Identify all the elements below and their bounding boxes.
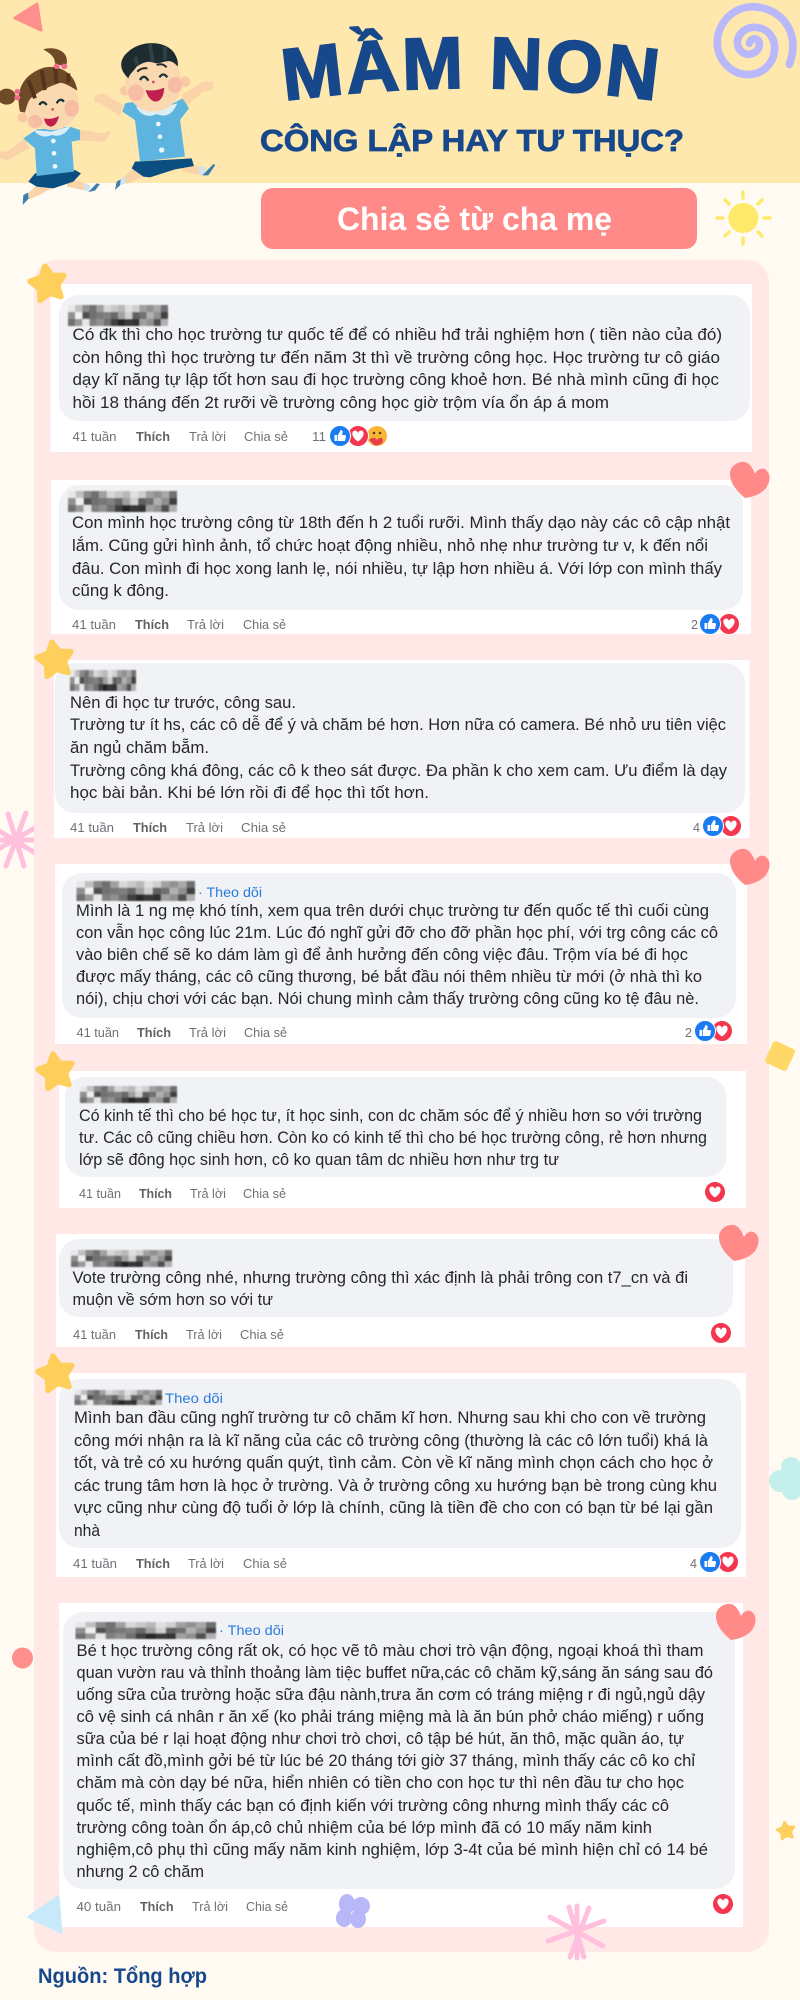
reaction: love bbox=[710, 1322, 732, 1344]
comment card 5 bbox=[59, 1071, 746, 1208]
comment bubble bbox=[63, 1612, 735, 1889]
icon: sun bbox=[717, 192, 770, 244]
girl bbox=[0, 48, 112, 205]
comment text: Có kinh tế thì cho bé học tư, ít học sinh, con dc chăm sóc để ý nhiều hơn so với trường bbox=[79, 1106, 702, 1125]
reaction: love bbox=[704, 1182, 726, 1202]
comment text bbox=[72, 325, 722, 412]
comment text: Mình ban đầu cũng nghĩ trường tư cô chăm kĩ hơn. Nhưng sau khi cho con về trường bbox=[74, 1408, 706, 1427]
blurred name bbox=[76, 1622, 216, 1639]
comment text: công mới nhận ra là kĩ năng của các cô trường công (thường là các cô lớn tuổi) khá là bbox=[74, 1431, 709, 1450]
comment text: vực cũng như cùng độ tuổi ở lớp là chính, cũng là tiền đề cho con có bạn từ bé lại gần bbox=[74, 1498, 713, 1517]
comment text: quốc tế, mình thấy các bạn có định kiến với trường công nhưng mình thấy các cô bbox=[76, 1796, 669, 1815]
comment text: học bài bản. Khi bé lớn rồi đi để học thì tốt hơn. bbox=[70, 783, 429, 802]
comment text: tư. Các cô cũng chiều hơn. Còn ko có kinh tế thì cho bé học trường công, rẻ hơn nhưng bbox=[79, 1128, 707, 1147]
header banner bbox=[0, 0, 800, 183]
comment actions: Chia sẻ bbox=[240, 1328, 284, 1342]
icon: mint flower bbox=[769, 1457, 800, 1500]
reactions bbox=[702, 816, 742, 836]
title: MẦM NON bbox=[282, 26, 658, 101]
comment text: hồi 18 tháng đến 2t rưỡi về trường công học giờ trộm vía ổn áp á mom bbox=[72, 393, 609, 412]
follow link: Theo dõi bbox=[165, 1391, 223, 1406]
icon: coral heart 2 bbox=[730, 849, 770, 885]
card surface bbox=[59, 1603, 743, 1927]
comment actions bbox=[73, 1557, 697, 1571]
blurred name bbox=[71, 1250, 172, 1267]
comment text bbox=[72, 1268, 688, 1309]
comment text: các trung tâm hơn là học ở trường. Và ở trường công xu hướng bạn bè trong cùng khu bbox=[74, 1476, 717, 1495]
reactions bbox=[700, 1552, 738, 1572]
follow link: · Theo dõi bbox=[198, 885, 262, 900]
comment text bbox=[79, 1106, 707, 1169]
icon: pink triangle bbox=[15, 4, 41, 30]
comment bubble bbox=[65, 1077, 726, 1177]
comment bubble bbox=[59, 295, 750, 421]
comment card 4 bbox=[55, 864, 747, 1044]
comment actions: Trả lời bbox=[189, 430, 226, 444]
comment actions bbox=[72, 618, 698, 632]
card surface bbox=[56, 1373, 746, 1577]
icon: coral heart 3 bbox=[719, 1225, 759, 1261]
comment text: chăm mà còn dạy bé nữa, hiển nhiên có tiền cho con học tư thì nên đầu tư cho học bbox=[76, 1773, 684, 1792]
comment actions: 11 bbox=[312, 430, 326, 444]
comment actions: Trả lời bbox=[188, 1557, 224, 1571]
card surface bbox=[59, 1071, 746, 1208]
comment actions: 4 bbox=[690, 1557, 697, 1571]
comment actions bbox=[73, 1328, 284, 1342]
comment actions: Trả lời bbox=[190, 1187, 226, 1201]
icon: coral dot bbox=[12, 1648, 33, 1668]
blurred name bbox=[80, 1086, 177, 1103]
comment actions: 41 tuần bbox=[79, 1187, 121, 1201]
comment actions bbox=[76, 1900, 288, 1914]
comment text: nói), chịu chơi với các bạn. Nói chung mình cảm thấy trường công cũng ko tệ đâu nè. bbox=[76, 989, 699, 1008]
panel: comments background bbox=[34, 260, 769, 1952]
card surface bbox=[50, 284, 752, 452]
comment bubble bbox=[62, 873, 736, 1018]
comment actions: 4 bbox=[693, 821, 700, 835]
comment actions: Chia sẻ bbox=[246, 1900, 288, 1914]
comment text: còn hông thì học trường tư đến năm 3t thì về trường công học. Học trường tư cô giáo bbox=[72, 348, 720, 367]
reaction: love bbox=[712, 1894, 734, 1914]
comment actions: 41 tuần bbox=[76, 1026, 119, 1040]
comment actions bbox=[72, 430, 326, 444]
comment actions: Thích bbox=[135, 618, 169, 632]
comment actions: Thích bbox=[136, 1557, 170, 1571]
comment actions: 41 tuần bbox=[70, 821, 114, 835]
icon: purple clover bbox=[336, 1894, 370, 1928]
comment actions: Chia sẻ bbox=[244, 430, 288, 444]
blurred name bbox=[68, 305, 168, 326]
comment bubble bbox=[59, 485, 743, 610]
comment actions bbox=[76, 1026, 692, 1040]
comment actions: Chia sẻ bbox=[244, 1026, 287, 1040]
comment text: cô vệ sinh cá nhân r ăn xế (ko phải tráng miệng mà là ăn bún phở cháo miếng) r uống bbox=[76, 1707, 704, 1726]
icon: light-blue triangle bbox=[29, 1897, 61, 1932]
illustration: two jumping children bbox=[0, 43, 215, 205]
comment actions: 41 tuần bbox=[73, 1557, 117, 1571]
blurred name bbox=[68, 491, 177, 512]
comment bubble bbox=[59, 1239, 733, 1317]
comment actions bbox=[79, 1187, 286, 1201]
icon: yellow star 4 bbox=[36, 1353, 76, 1392]
comment actions: Chia sẻ bbox=[243, 618, 286, 632]
comment text bbox=[74, 1408, 717, 1540]
comment text bbox=[76, 1641, 713, 1881]
comment actions: Trả lời bbox=[189, 1026, 226, 1040]
comment text: Mình là 1 ng mẹ khó tính, xem qua trên dưới chục trường tư đến quốc tế thì cuối cùng bbox=[76, 901, 709, 920]
comment actions: Thích bbox=[133, 821, 167, 835]
icon: yellow rounded square bbox=[764, 1040, 796, 1072]
comment text: Trường công khá đông, các cô k theo sát được. Đa phần k cho xem cam. Ưu điểm là dạy bbox=[70, 761, 727, 780]
comment actions: Trả lời bbox=[187, 618, 224, 632]
comment text: nhưng 2 cô chăm bbox=[76, 1862, 204, 1881]
boy bbox=[94, 43, 215, 190]
comment text: Vote trường công nhé, nhưng trường công thì xác định là phải trông con t7_cn và đi bbox=[72, 1268, 688, 1287]
card surface bbox=[54, 660, 750, 838]
card surface bbox=[56, 1234, 745, 1347]
comment actions: Thích bbox=[136, 430, 170, 444]
icon: purple spiral bbox=[717, 7, 793, 75]
comment bubble bbox=[59, 1379, 741, 1548]
blurred name bbox=[76, 881, 195, 901]
section pill heading bbox=[261, 188, 697, 249]
comment card 2 bbox=[51, 480, 751, 634]
comment text bbox=[70, 693, 727, 802]
comment text: Trường tư ít hs, các cô dễ để ý và chăm bé hơn. Hơn nữa có camera. Bé nhỏ ưu tiên việc bbox=[70, 715, 726, 734]
comment actions: 2 bbox=[691, 618, 698, 632]
comment text: ăn ngủ chăm bẵm. bbox=[70, 738, 209, 757]
comment text: mình cất đồ,mình gởi bé từ lúc bé 20 tháng tới giờ 37 tháng, mình thấy các cô ko chỉ bbox=[76, 1751, 695, 1770]
icon: yellow star 2 bbox=[35, 639, 75, 678]
comment text: muộn về sớm hơn so với tư bbox=[72, 1290, 273, 1309]
comment actions: Trả lời bbox=[186, 1328, 222, 1342]
comment actions: 41 tuần bbox=[72, 618, 116, 632]
section pill heading: Chia sẻ từ cha mẹ bbox=[337, 201, 612, 237]
comment text: được mấy tháng, các cô cũng thương, bé bắt đầu nói thêm nhiều từ mới (ở nhà thì ko bbox=[76, 967, 702, 986]
comment text: vào biên chế sẽ ko dám làm gì để ảnh hưởng đến công việc đâu. Trộm vía bé đi học bbox=[76, 945, 688, 964]
comment text: con vẫn học công lúc 21m. Lúc đó nghĩ gửi đỡ cho đỡ phần học phí, với trg công các cô bbox=[76, 923, 718, 942]
comment actions: 41 tuần bbox=[73, 1328, 116, 1342]
comment text: lắm. Cũng gửi hình ảnh, tổ chức hoạt động nhiều, nhỏ nhẹ như trường tư v, k đến nổi bbox=[72, 536, 708, 555]
comment text: tốt, và trẻ có xu hướng quấn quýt, tình cảm. Còn về kĩ năng mình chọn cách cho học ở bbox=[74, 1453, 713, 1472]
comment actions: Chia sẻ bbox=[243, 1557, 287, 1571]
card surface bbox=[51, 480, 751, 634]
icon: pink asterisk bbox=[548, 1906, 604, 1958]
icon: coral heart 1 bbox=[730, 462, 770, 498]
comment text: quan vườn rau và thỉnh thoảng làm tiệc buffet nữa,các cô chăm kỹ,sáng ăn sáng sau đó bbox=[76, 1663, 713, 1682]
follow link: · Theo dõi bbox=[219, 1623, 284, 1638]
icon: coral heart 4 bbox=[716, 1604, 756, 1640]
card surface bbox=[55, 864, 747, 1044]
comment text bbox=[72, 513, 730, 600]
icon: small yellow star bbox=[776, 1821, 796, 1840]
comment actions: Chia sẻ bbox=[243, 1187, 286, 1201]
icon: yellow star 3 bbox=[36, 1051, 76, 1090]
comment text: Có đk thì cho học trường tư quốc tế để có nhiều hđ trải nghiệm hơn ( tiền nào của đó) bbox=[72, 325, 722, 344]
comment card 1 bbox=[50, 284, 752, 452]
comment actions: 40 tuần bbox=[76, 1900, 121, 1914]
comment text: dạy kĩ năng tự lập tốt hơn sau đi học trường công khoẻ hơn. Bé nhà mình cũng đi học bbox=[72, 370, 719, 389]
comment card 3 bbox=[54, 660, 750, 838]
comment actions: 41 tuần bbox=[72, 430, 117, 444]
comment text: lớp sẽ đông học sinh hơn, cô ko quan tâm dc nhiều hơn như trg tư bbox=[79, 1150, 559, 1169]
comment text: đâu. Con mình đi học xong lanh lẹ, nói nhiều, tự lập hơn nhiều á. Với lớp con mình thấy bbox=[72, 559, 722, 578]
comment text: Nên đi học tư trước, công sau. bbox=[70, 693, 296, 712]
reactions bbox=[694, 1020, 732, 1042]
comment actions: 2 bbox=[685, 1026, 692, 1040]
comment card 8 bbox=[59, 1603, 743, 1927]
blurred name bbox=[74, 1390, 162, 1405]
reactions bbox=[700, 614, 740, 634]
icon: yellow star 1 bbox=[28, 263, 68, 302]
blurred name bbox=[70, 670, 136, 691]
comment card 7 bbox=[56, 1373, 746, 1577]
comment text: nhà bbox=[74, 1521, 100, 1540]
comment text: nghiệm,cô phụ thì cũng mấy năm kinh nghiệm, lớp 3-4t của bé mình hiện chỉ có 14 bé bbox=[76, 1840, 708, 1859]
comment actions: Thích bbox=[140, 1900, 174, 1914]
subtitle: CÔNG LẬP HAY TƯ THỤC? bbox=[260, 122, 684, 158]
comment text: sữa của bé r lại hoạt động như chơi trò chơi, cô tập bé hút, ăn thô, mặc quần áo, tự bbox=[76, 1729, 684, 1748]
comment actions: Trả lời bbox=[192, 1900, 228, 1914]
comment actions: Thích bbox=[139, 1187, 172, 1201]
comment text: trường công toàn ổn áp,cô chủ nhiệm của bé lớp mình đã có 10 mấy năm kinh bbox=[76, 1818, 652, 1837]
comment text: cũng k đông. bbox=[72, 581, 169, 600]
comment actions bbox=[70, 821, 700, 835]
comment text: Bé t học trường công rất ok, có học vẽ tô màu chơi trò vận động, ngoại khoá thì tham bbox=[76, 1641, 704, 1660]
comment text bbox=[76, 901, 718, 1008]
comment bubble bbox=[55, 663, 745, 813]
comment actions: Trả lời bbox=[186, 821, 223, 835]
comment card 6 bbox=[56, 1234, 745, 1347]
comment actions: Thích bbox=[137, 1026, 171, 1040]
comment actions: Thích bbox=[135, 1328, 168, 1342]
comment actions: Chia sẻ bbox=[241, 821, 286, 835]
source credit: Nguồn: Tổng hợp bbox=[38, 1965, 207, 1988]
reactions bbox=[330, 426, 387, 446]
icon: pink snowflake behind panel bbox=[0, 813, 40, 866]
comment text: uống sữa của trường hoặc sữa đậu nành,trưa ăn cơm có tráng miệng r đi ngủ,ngủ dậy bbox=[76, 1685, 705, 1704]
comment text: Con mình học trường công từ 18th đến h 2 tuổi rưỡi. Mình thấy dạo này các cô cập nhật bbox=[72, 513, 730, 532]
